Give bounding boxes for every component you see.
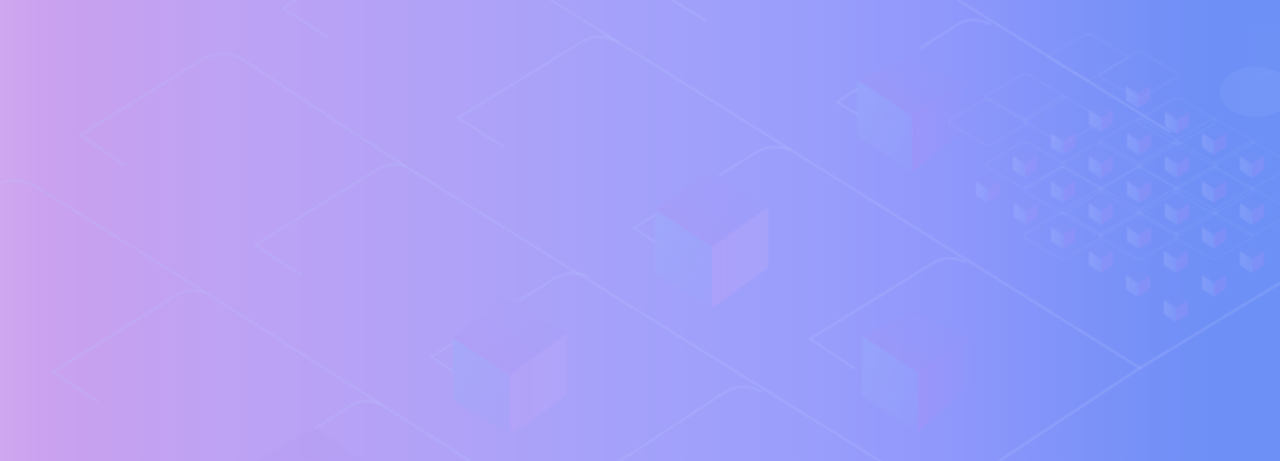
faint panel: top right — [1220, 30, 1280, 75]
small cube array — [976, 81, 1264, 322]
isometric tile grid — [948, 34, 1280, 259]
faint ellipse: top right — [1220, 67, 1280, 117]
cube: lower left — [453, 300, 567, 435]
dark shadow patch: bottom — [255, 428, 362, 461]
cube: centre — [655, 172, 768, 308]
cube: upper right, fading — [857, 58, 970, 172]
cube: lower right, fading — [862, 312, 975, 432]
